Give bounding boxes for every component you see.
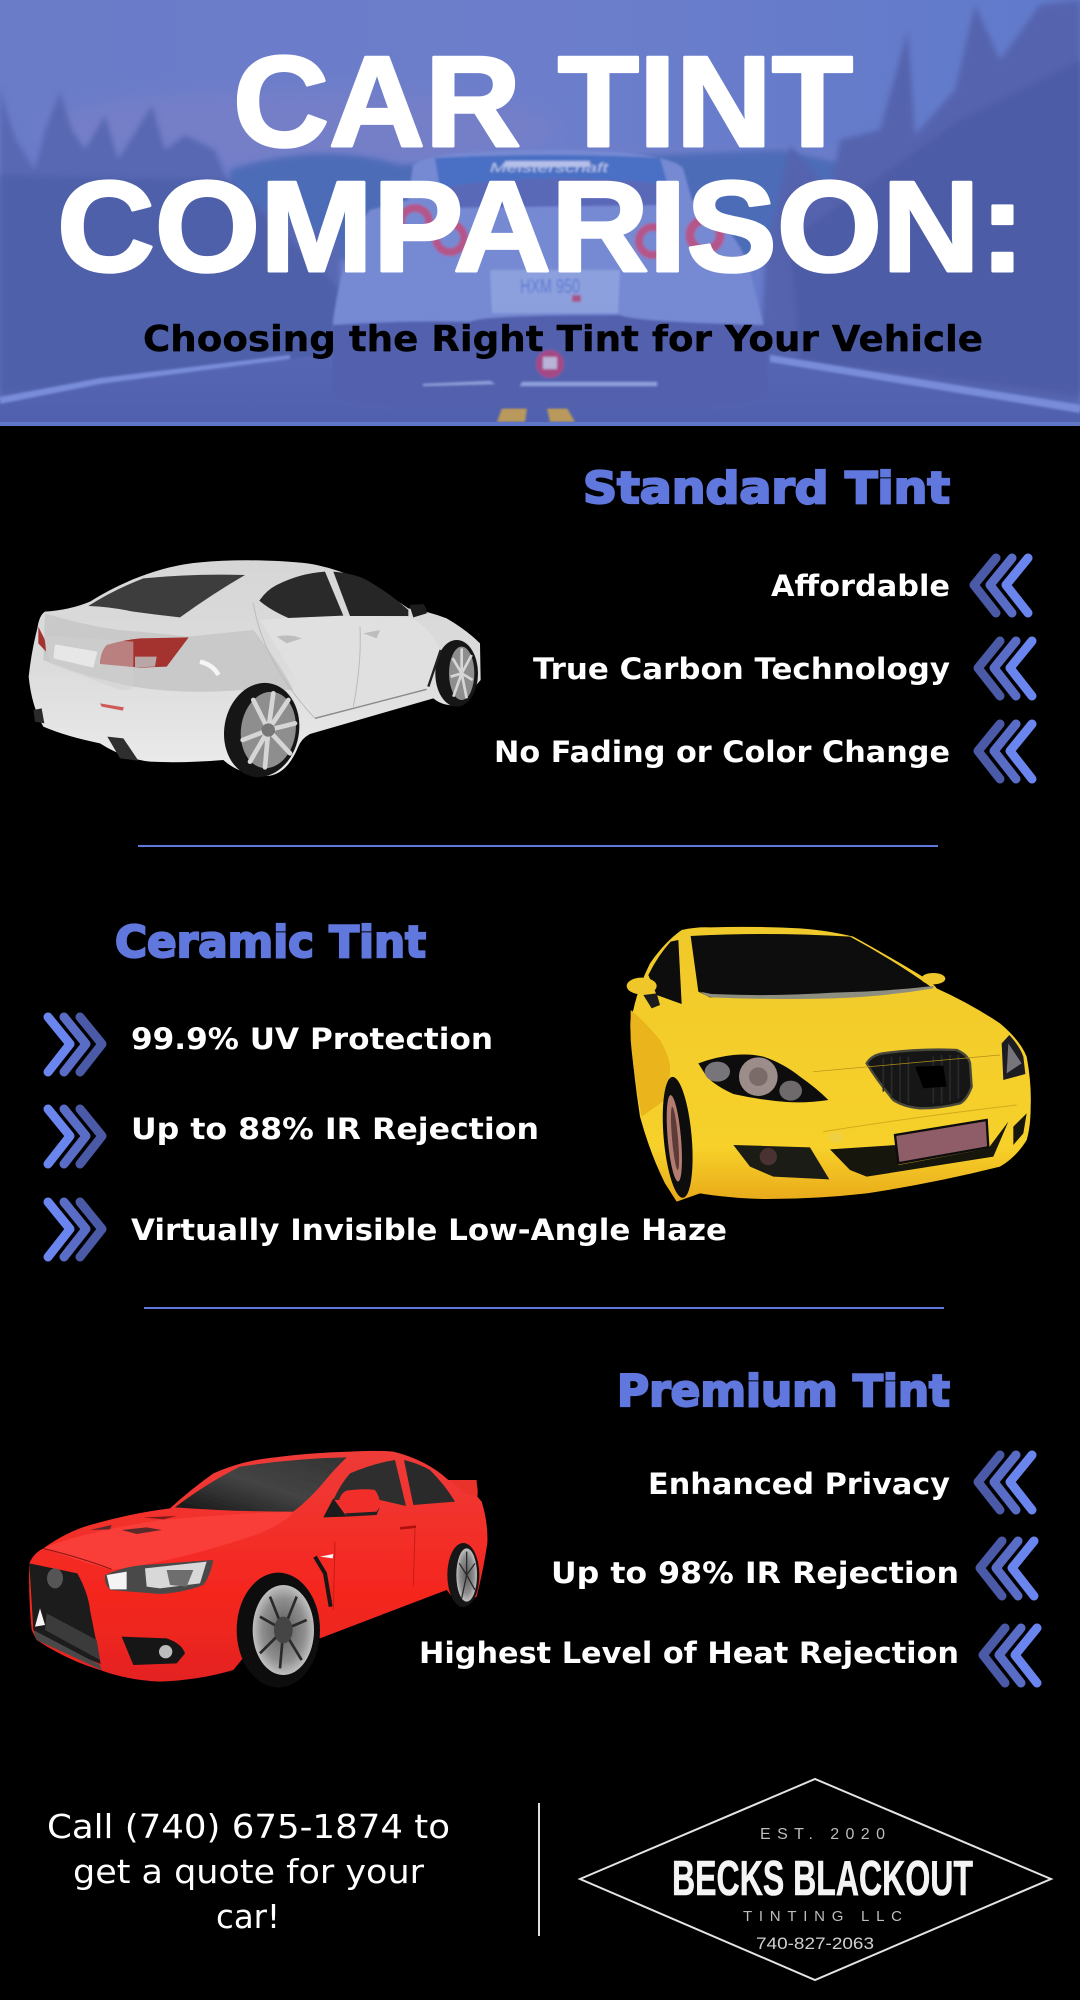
list: standard tint features xyxy=(494,569,950,769)
heading: standard tint: Standard Tint xyxy=(583,463,950,514)
list: premium tint features: Highest Level of Heat Rejection xyxy=(419,1636,959,1670)
list: standard tint features: No Fading or Color Change xyxy=(494,735,950,769)
list: ceramic tint features xyxy=(131,1022,727,1247)
yellow car illustration xyxy=(627,927,1031,1202)
list: premium tint features: Enhanced Privacy xyxy=(648,1467,950,1501)
panel: standard tint xyxy=(29,463,1032,783)
chevron icons: premium tint xyxy=(978,1455,1037,1683)
background photo: car rear: Meisterschaft xyxy=(490,160,610,175)
title: CAR TINT xyxy=(233,30,853,174)
list: standard tint features: Affordable xyxy=(771,569,950,603)
chevron icons: ceramic tint xyxy=(48,1017,102,1257)
background photo: car rear: HXM 950 xyxy=(520,276,580,298)
title xyxy=(57,30,1025,299)
logo: becks blackout tinting: 740-827-2063 xyxy=(756,1934,874,1953)
white car illustration xyxy=(29,560,481,783)
list: ceramic tint features: Up to 88% IR Rejection xyxy=(131,1112,539,1146)
subtitle: Choosing the Right Tint for Your Vehicle xyxy=(143,319,983,360)
red car illustration xyxy=(29,1451,487,1687)
logo: becks blackout tinting xyxy=(580,1779,1051,1980)
call to action: get a quote for your xyxy=(73,1852,424,1891)
logo: becks blackout tinting: TINTING LLC xyxy=(743,1908,902,1925)
list: premium tint features xyxy=(419,1467,959,1670)
heading: ceramic tint: Ceramic Tint xyxy=(115,917,426,968)
call to action: car! xyxy=(216,1897,280,1936)
footer xyxy=(47,1779,1051,1980)
list: premium tint features: Up to 98% IR Rejection xyxy=(551,1556,959,1590)
background photo: car rear xyxy=(330,150,767,408)
panel: ceramic tint xyxy=(48,917,1031,1257)
call to action: Call (740) 675-1874 to xyxy=(47,1807,450,1846)
call to action xyxy=(47,1807,450,1936)
logo: becks blackout tinting: EST. 2020 xyxy=(760,1826,885,1843)
chevron icons: standard tint xyxy=(974,558,1032,779)
list: standard tint features: True Carbon Technology xyxy=(533,652,950,686)
background photo: clouds, trees and road xyxy=(0,0,1080,422)
header banner xyxy=(0,0,1080,426)
title: COMPARISON: xyxy=(57,155,1025,299)
list: ceramic tint features: 99.9% UV Protection xyxy=(131,1022,493,1056)
list: ceramic tint features: Virtually Invisible Low-Angle Haze xyxy=(131,1213,727,1247)
heading: premium tint: Premium Tint xyxy=(617,1366,950,1417)
panel: premium tint xyxy=(29,1366,1037,1687)
